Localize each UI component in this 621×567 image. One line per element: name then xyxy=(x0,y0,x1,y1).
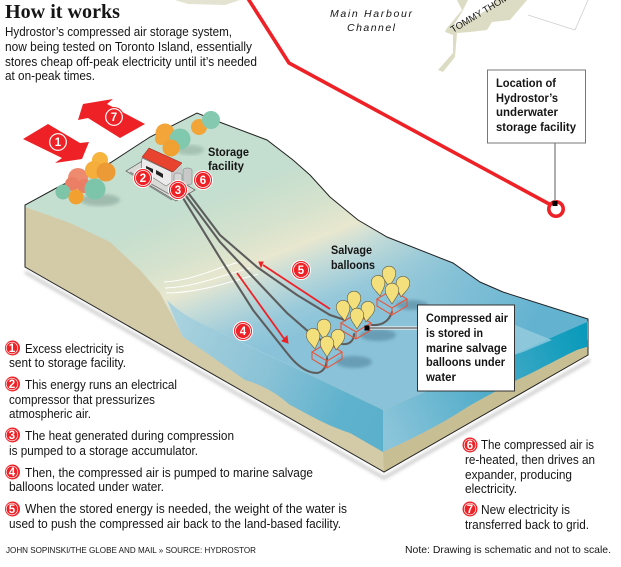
step 3 text: 3 xyxy=(9,430,15,442)
step 3 text: The heat generated during compression xyxy=(25,429,234,443)
marker 5 xyxy=(292,260,310,280)
step 6 text xyxy=(462,438,595,496)
label: Storage facility xyxy=(208,145,249,173)
track lines xyxy=(130,172,178,200)
callout: compressed air stored: Compressed air xyxy=(426,311,508,325)
callout: location of facility: Location of xyxy=(496,76,557,90)
step 7 text: New electricity is xyxy=(481,503,570,517)
map label: Main Harbour Channel xyxy=(330,8,412,34)
marker 7 xyxy=(104,107,124,127)
side wall xyxy=(172,163,182,182)
tanks xyxy=(183,168,192,185)
step 4 text: balloons located under water. xyxy=(9,480,164,494)
map label: Main Harbour Channel: Main Harbour xyxy=(330,8,412,20)
callout: location of facility: storage facility xyxy=(496,120,576,134)
intro text: now being tested on Toronto Island, essentially xyxy=(5,40,253,54)
block drop shadow xyxy=(25,270,590,480)
water front right face xyxy=(383,322,587,452)
roof xyxy=(142,148,182,172)
step 4 text xyxy=(5,464,313,494)
balloon cluster: right xyxy=(370,266,411,315)
trees: back group xyxy=(155,111,220,156)
callout: location of facility: Hydrostor’s xyxy=(496,91,558,105)
storage facility building xyxy=(126,148,195,201)
step 2 text: atmospheric air. xyxy=(9,407,91,421)
marker 3: 3 xyxy=(175,185,181,197)
shoreline wave lines xyxy=(164,262,258,293)
step 1 text: Excess electricity is xyxy=(25,342,124,356)
step 6 text: re-heated, then drives an xyxy=(465,453,595,467)
callout: location of facility xyxy=(488,70,586,206)
intro text: at on-peak times. xyxy=(5,69,95,83)
marker 6: 6 xyxy=(200,175,206,187)
air pipes xyxy=(183,194,392,373)
step 4 text: 4 xyxy=(9,467,16,479)
step 1 text: 1 xyxy=(9,343,16,355)
trees: foreground group xyxy=(56,152,120,206)
marker 5: 5 xyxy=(298,265,305,277)
intro text: stores cheap off-peak electricity until it’s needed xyxy=(5,55,257,69)
step 2 text xyxy=(5,376,177,421)
balloon cluster: left xyxy=(305,319,346,368)
platform xyxy=(126,160,195,201)
label: Salvage balloons: Salvage xyxy=(331,243,372,257)
intro text xyxy=(5,25,257,83)
marker 6 xyxy=(194,170,212,190)
callout: compressed air stored: is stored in xyxy=(426,326,483,340)
red flow arrow 5 xyxy=(259,262,330,309)
step 3 text: is pumped to a storage accumulator. xyxy=(9,444,198,458)
title: How it works xyxy=(5,1,120,23)
callout: location of facility: underwater xyxy=(496,105,558,119)
marker 2 xyxy=(134,168,152,188)
step 7 text: 7 xyxy=(467,504,473,516)
marker 1: 1 xyxy=(55,137,62,149)
label: Salvage balloons xyxy=(331,243,375,272)
marker 7: 7 xyxy=(111,112,117,124)
step 4 text: Then, the compressed air is pumped to marine salvage xyxy=(25,466,313,480)
label: Storage facility: facility xyxy=(208,159,244,173)
step 1 text: sent to storage facility. xyxy=(9,356,126,370)
diagram: terrain block xyxy=(25,113,590,480)
location marker ring xyxy=(549,202,563,216)
walls xyxy=(141,158,172,186)
land and water surface xyxy=(25,113,588,410)
red location line xyxy=(247,0,551,205)
big arrow 1: to storage xyxy=(23,124,89,163)
map label: Main Harbour Channel: Channel xyxy=(347,22,396,34)
step 5 text: used to push the compressed air back to the land-based facility. xyxy=(9,517,341,531)
red flow arrow 4 xyxy=(237,273,288,343)
step 7 text: transferred back to grid. xyxy=(465,518,589,532)
marker 1 xyxy=(48,132,68,152)
step 2 text: 2 xyxy=(9,379,15,391)
step 6 text: electricity. xyxy=(465,482,517,496)
step 2 text: This energy runs an electrical xyxy=(25,378,177,392)
note: Note: Drawing is schematic and not to scale. xyxy=(405,544,611,556)
intro text: Hydrostor’s compressed air storage system, xyxy=(5,25,232,39)
step 5 text xyxy=(5,502,347,531)
step 1 text xyxy=(5,340,126,370)
doors xyxy=(146,166,163,178)
water front left face xyxy=(167,300,383,452)
sand front right xyxy=(383,347,588,472)
step 3 text xyxy=(5,428,234,458)
step 7 text xyxy=(462,502,589,532)
marker 3 xyxy=(168,180,188,200)
callout: compressed air stored: water xyxy=(425,370,456,384)
callout: compressed air stored: balloons under xyxy=(426,355,505,369)
outline xyxy=(25,113,588,472)
map: Toronto Island land fragments xyxy=(175,0,588,72)
marker 4: 4 xyxy=(240,326,247,338)
marker 2: 2 xyxy=(140,173,146,185)
step 6 text: expander, producing xyxy=(465,468,572,482)
credit line: JOHN SOPINSKI/THE GLOBE AND MAIL » SOURCE: HYDROSTOR xyxy=(6,545,256,555)
label: Storage facility: Storage xyxy=(208,145,249,159)
step 5 text: 5 xyxy=(9,504,16,516)
sand base xyxy=(25,205,588,472)
step 2 text: compressor that pressurizes xyxy=(9,393,155,407)
balloon cluster: middle xyxy=(335,291,376,339)
big arrow 7: back to grid xyxy=(78,99,145,138)
label: Salvage balloons: balloons xyxy=(331,258,375,272)
step 6 text: 6 xyxy=(467,440,473,452)
callout: compressed air stored: marine salvage xyxy=(426,341,507,355)
water reflection wedge xyxy=(505,325,552,358)
callout: compressed air stored xyxy=(364,305,514,391)
balloon shadows xyxy=(336,300,428,368)
marker 4 xyxy=(234,322,252,340)
step 5 text: When the stored energy is needed, the weight of the water is xyxy=(25,502,347,516)
step 6 text: The compressed air is xyxy=(481,438,594,452)
far water tint xyxy=(358,220,588,372)
